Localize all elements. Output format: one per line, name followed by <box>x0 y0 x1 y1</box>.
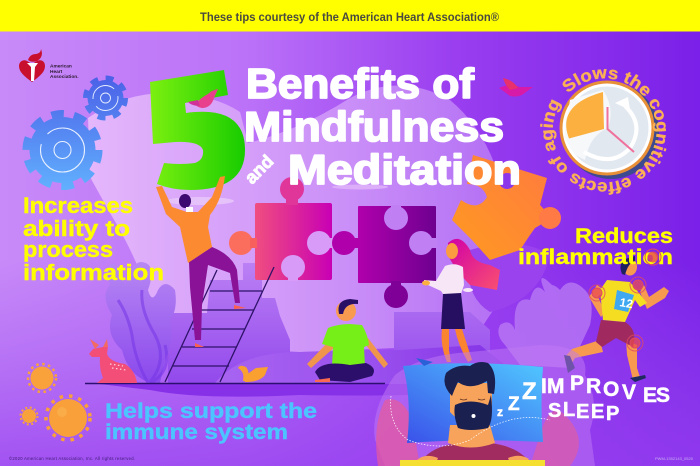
word: sleep: SLEEP <box>548 399 619 425</box>
climber collar <box>186 207 193 212</box>
plant right <box>498 278 592 368</box>
clock hands <box>608 107 634 152</box>
sleeper face <box>450 383 492 423</box>
clock orange wedge <box>566 92 604 138</box>
woman head <box>446 243 458 259</box>
deer body <box>89 346 137 383</box>
runner front shoe <box>630 375 646 382</box>
deer <box>89 339 137 383</box>
pale cloud under title <box>332 184 388 190</box>
ground shadow <box>100 384 530 397</box>
line: increases: Increases <box>23 193 133 218</box>
caption: reduces inflammation <box>518 225 673 269</box>
pillow <box>403 363 543 443</box>
runner rear leg <box>564 340 603 366</box>
sleeper neck <box>448 425 495 448</box>
woman skirt <box>441 293 465 329</box>
line: process: process <box>23 237 113 262</box>
line: information: information <box>23 260 164 285</box>
bird on the 5 <box>188 89 218 108</box>
purple blob behind woman <box>468 244 550 312</box>
sleep background blobs <box>374 345 595 466</box>
sleep zzz: Z <box>508 394 520 415</box>
runner hair <box>620 256 635 275</box>
virus small top <box>28 364 56 392</box>
puzzle piece: purple <box>332 205 437 308</box>
foreground hill <box>215 345 530 385</box>
copyright footer: ©2020 American Heart Association, Inc. All rights reserved. <box>9 456 135 461</box>
line: inflammation: inflammation <box>518 246 673 269</box>
climber torso and arms <box>156 176 225 263</box>
title line 3: Meditation <box>288 146 521 193</box>
runner shorts <box>596 320 634 347</box>
dotted breath line <box>391 396 550 446</box>
meditator head <box>336 301 356 321</box>
runner <box>564 256 669 382</box>
logo torch flame <box>28 49 42 62</box>
title word: and: and <box>241 151 277 188</box>
runner rear shoe <box>564 355 575 373</box>
virus large <box>46 396 90 440</box>
document code: PWM-1352143_0520 <box>655 456 694 461</box>
sleeper eyes <box>460 399 485 400</box>
runner shirt <box>600 280 647 322</box>
logo torch <box>27 63 38 81</box>
deer ears <box>90 339 108 349</box>
climber legs <box>189 247 240 340</box>
meditator foot <box>315 378 330 382</box>
sleeper hands <box>417 456 529 463</box>
runner left arm <box>589 285 605 317</box>
sleeping man <box>391 362 550 466</box>
line: reduces: Reduces <box>575 225 673 248</box>
marker rings <box>589 277 646 351</box>
meditating person <box>307 299 388 382</box>
meditator legs <box>315 363 374 382</box>
ladder <box>165 267 274 382</box>
inflammation marker on caption <box>645 249 661 265</box>
woman legs <box>442 329 472 362</box>
title line 2: Mindfulness <box>244 103 504 150</box>
pale cloud behind climber <box>166 197 234 205</box>
woman right hand <box>463 288 473 292</box>
word: improves: IMPROVES <box>541 372 670 407</box>
logo heart <box>19 60 45 82</box>
meditator shirt <box>322 324 369 366</box>
puzzle piece: pink <box>229 177 333 281</box>
inflammation markers <box>592 280 643 348</box>
woman blouse <box>424 264 464 294</box>
puzzle piece: orange <box>452 155 561 260</box>
pale hill backdrop <box>88 85 510 352</box>
paper plane <box>416 358 433 366</box>
large green number 5 <box>150 70 245 190</box>
meditator arms <box>307 338 388 368</box>
title line 1: Benefits of <box>246 60 475 107</box>
runner head <box>623 258 637 276</box>
climbing person <box>156 176 246 347</box>
logo text: Association. <box>50 74 79 80</box>
woman hair <box>448 239 500 290</box>
runner bib: 12 <box>618 295 634 311</box>
meditator hair <box>338 299 358 314</box>
distant city skyline <box>168 263 490 385</box>
sleeper mouth <box>472 414 476 418</box>
logo text: Heart <box>50 69 63 75</box>
virus cluster <box>20 364 90 440</box>
caption: increases ability <box>23 193 164 285</box>
sleeper hair <box>444 362 495 396</box>
title <box>241 60 521 193</box>
sleeper beard <box>454 395 492 430</box>
sleep zzz: z <box>497 405 503 419</box>
flying bird top right <box>499 78 533 96</box>
woman <box>422 239 500 362</box>
banner text: These tips courtesy of the American Heart Association® <box>200 12 499 24</box>
ground line <box>85 382 385 384</box>
line: ability to: ability to <box>23 216 130 241</box>
deer spots <box>110 364 126 370</box>
clock arrow <box>584 106 636 159</box>
clock <box>560 80 659 179</box>
blanket <box>400 460 545 466</box>
logo text: American <box>50 64 72 70</box>
top banner <box>0 0 700 32</box>
caption: immune system <box>105 400 317 444</box>
caption: improves sleep <box>541 372 670 425</box>
line: immune system: immune system <box>105 421 288 444</box>
runner right arm <box>640 285 669 309</box>
virus tiny <box>20 408 38 424</box>
runner front leg <box>626 340 641 380</box>
line: helps support the: Helps support the <box>105 400 317 423</box>
sleep zzz: Z <box>522 378 537 405</box>
climber head <box>179 194 191 208</box>
squirrel <box>238 366 268 382</box>
icon: large gear <box>26 114 98 186</box>
circular caption: Slows the cognitive effects of aging <box>540 68 666 195</box>
climber shoes <box>195 305 246 347</box>
American Heart Association logo <box>19 49 79 82</box>
sleeper shoulders <box>422 443 528 466</box>
icon: small gear <box>86 78 126 118</box>
plant left <box>105 262 176 383</box>
woman left hand <box>422 280 430 286</box>
